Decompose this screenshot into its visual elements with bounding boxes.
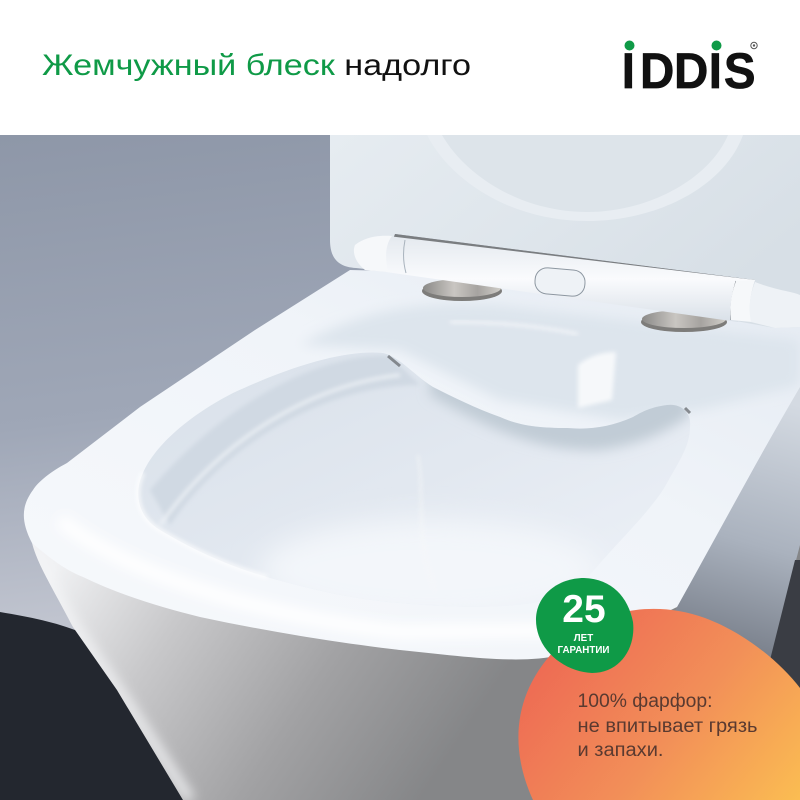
badge: 25 years warranty: 25 <box>562 588 606 631</box>
callout text: не впитывает грязь <box>578 716 758 737</box>
callout text: 100% фарфор: <box>578 691 712 712</box>
dark corner behind toilet <box>770 560 800 800</box>
highlight on front rim <box>354 624 538 635</box>
logo: IDDIS: S <box>724 44 756 99</box>
icon: steel hinge mount left <box>422 279 502 301</box>
silhouette highlight <box>36 548 190 800</box>
badge: 25 years warranty <box>536 578 633 673</box>
title: Жемчужный блеск надолго <box>42 49 471 82</box>
toilet body <box>24 270 800 800</box>
hinge bar <box>383 236 755 322</box>
logo: IDDIS: I <box>622 44 635 99</box>
left end highlight <box>354 236 392 272</box>
logo: IDDIS <box>622 40 757 99</box>
front rim inner edge <box>138 473 267 577</box>
header band <box>0 0 800 135</box>
logo: IDDIS: D <box>674 44 708 99</box>
badge: 25 years warranty: ЛЕТ <box>574 633 593 644</box>
hinge gap <box>393 234 755 283</box>
callout text <box>578 691 758 761</box>
rear shelf highlights <box>450 322 578 334</box>
bright lower bowl <box>266 522 577 606</box>
right end cap <box>730 280 755 322</box>
bowl opening <box>140 320 691 572</box>
shaded band under the rear shelf <box>430 370 690 450</box>
logo: IDDIS: I <box>709 44 722 99</box>
icon: steel hinge mount right <box>641 310 727 332</box>
icon: release button <box>534 267 586 297</box>
callout text: и запахи. <box>578 740 664 761</box>
inner wall shading <box>150 356 420 525</box>
floor <box>0 612 220 800</box>
right side face <box>600 385 800 800</box>
rim top <box>24 270 800 659</box>
badge: 25 years warranty: ГАРАНТИИ <box>558 645 609 656</box>
jet openings <box>388 356 400 366</box>
logo: IDDIS: D <box>640 44 674 99</box>
soft shade on rear deck <box>300 304 800 420</box>
orange blob <box>518 609 800 800</box>
seat ring <box>427 135 743 221</box>
raised seat lid <box>330 135 800 328</box>
side of the bowl <box>32 500 800 800</box>
